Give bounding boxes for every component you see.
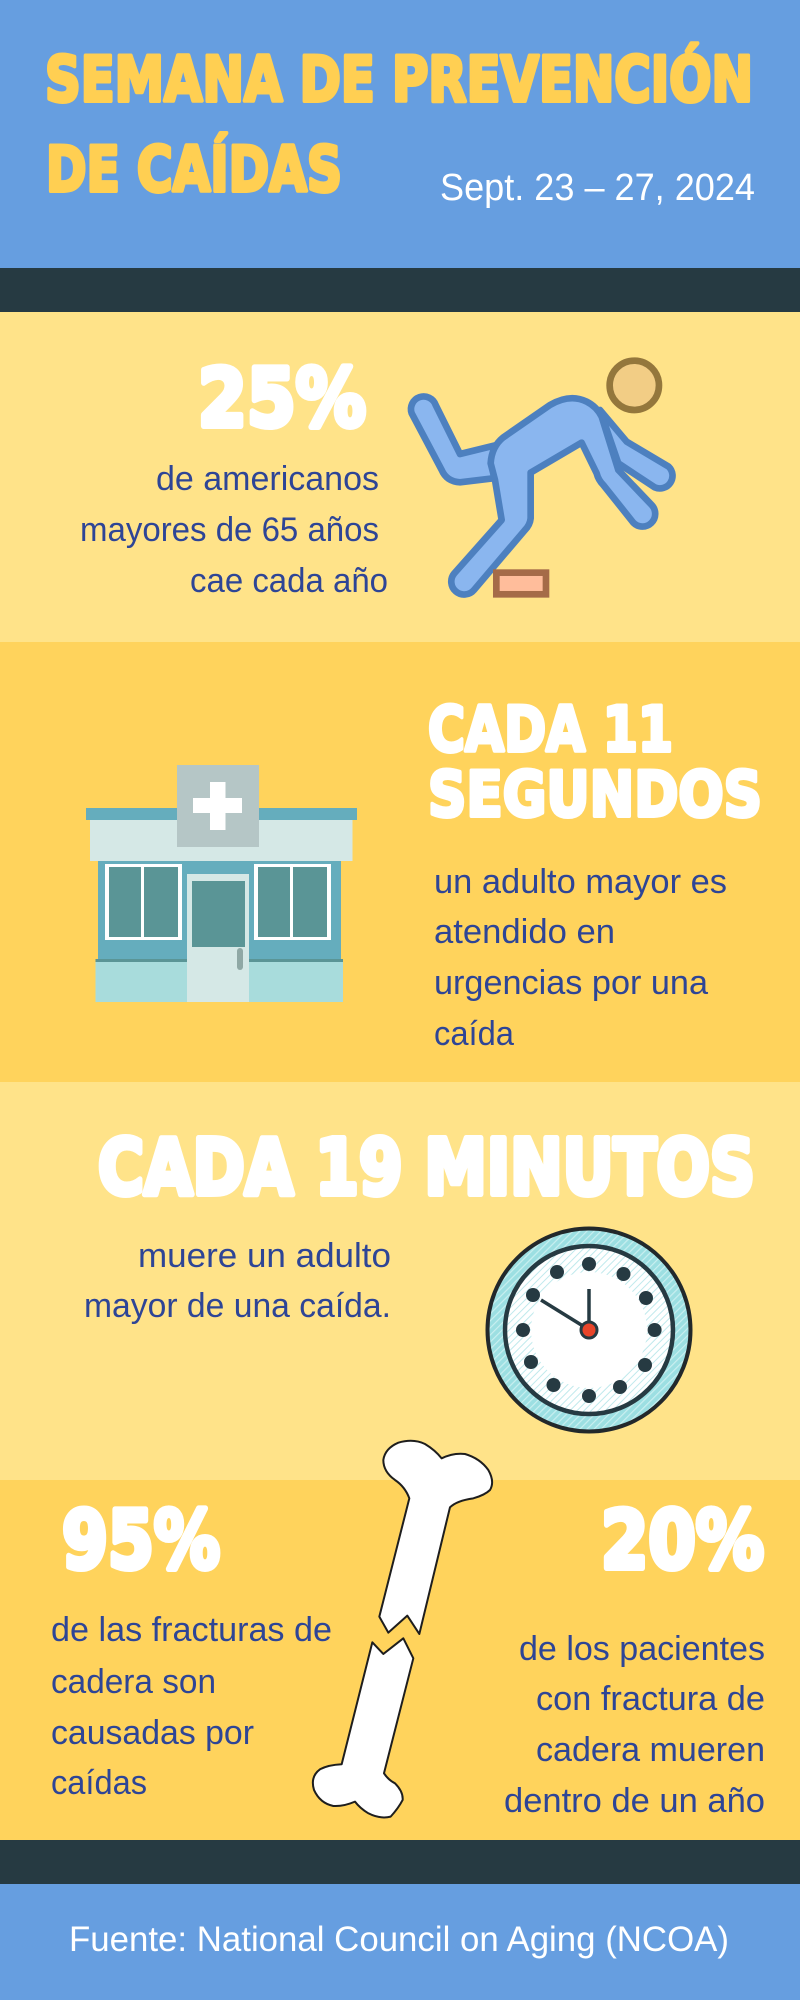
text block: 25% description: cae cada año (190, 562, 388, 600)
panel: 25% of older Americans (0, 312, 800, 642)
icon: person tripping over brick (411, 361, 673, 595)
text block: 25% description (80, 460, 388, 600)
text block: 11 seconds description: un adulto mayor es (434, 863, 727, 901)
stat: 95%: 95% (62, 1494, 220, 1587)
bottom dark band (0, 1840, 800, 1884)
panel: every 11 seconds (0, 642, 800, 1082)
text block: 95% description: causadas por (51, 1714, 254, 1752)
panel: every 19 minutes (0, 1082, 800, 1480)
text block: 11 seconds description: urgencias por una (434, 964, 708, 1002)
text block: 19 minutes description: mayor de una caída. (84, 1287, 391, 1325)
text block: 95% description: caídas (51, 1764, 147, 1802)
text block: 20% description: dentro de un año (504, 1782, 765, 1820)
panel: hip fractures (0, 1441, 800, 1840)
text block: 95% description: cadera son (51, 1663, 216, 1701)
source text: Fuente: National Council on Aging (NCOA) (69, 1920, 729, 1959)
text block: 20% description: de los pacientes (519, 1630, 765, 1668)
heading: CADA 11 SEGUNDOS: CADA 11 (428, 693, 673, 766)
text block: 95% description (51, 1611, 332, 1802)
heading: CADA 11 SEGUNDOS (428, 693, 762, 831)
text block: 11 seconds description: caída (434, 1015, 514, 1053)
text block: 25% description: de americanos (156, 460, 379, 498)
title: DE CAÍDAS (46, 133, 342, 206)
text block: 95% description: de las fracturas de (51, 1611, 332, 1649)
icon: broken bone (313, 1441, 492, 1817)
text block: 20% description: con fractura de (536, 1680, 765, 1718)
top dark band (0, 268, 800, 312)
icon: wall clock (488, 1228, 690, 1432)
date: Sept. 23 – 27, 2024 (440, 167, 755, 209)
panel: footer (0, 1884, 800, 2000)
stat: 25%: 25% (198, 352, 366, 445)
text block: 25% description: mayores de 65 años (80, 511, 379, 549)
text block: 11 seconds description (434, 863, 727, 1053)
text block: 19 minutes description (84, 1237, 391, 1325)
title (45, 43, 753, 206)
panel: header (0, 0, 800, 268)
text block: 20% description (504, 1630, 765, 1820)
text block: 19 minutes description: muere un adulto (138, 1237, 391, 1275)
text block: 20% description: cadera mueren (536, 1731, 765, 1769)
stat: 20%: 20% (601, 1494, 764, 1587)
icon: hospital building (86, 765, 357, 1002)
text block: 11 seconds description: atendido en (434, 913, 615, 951)
